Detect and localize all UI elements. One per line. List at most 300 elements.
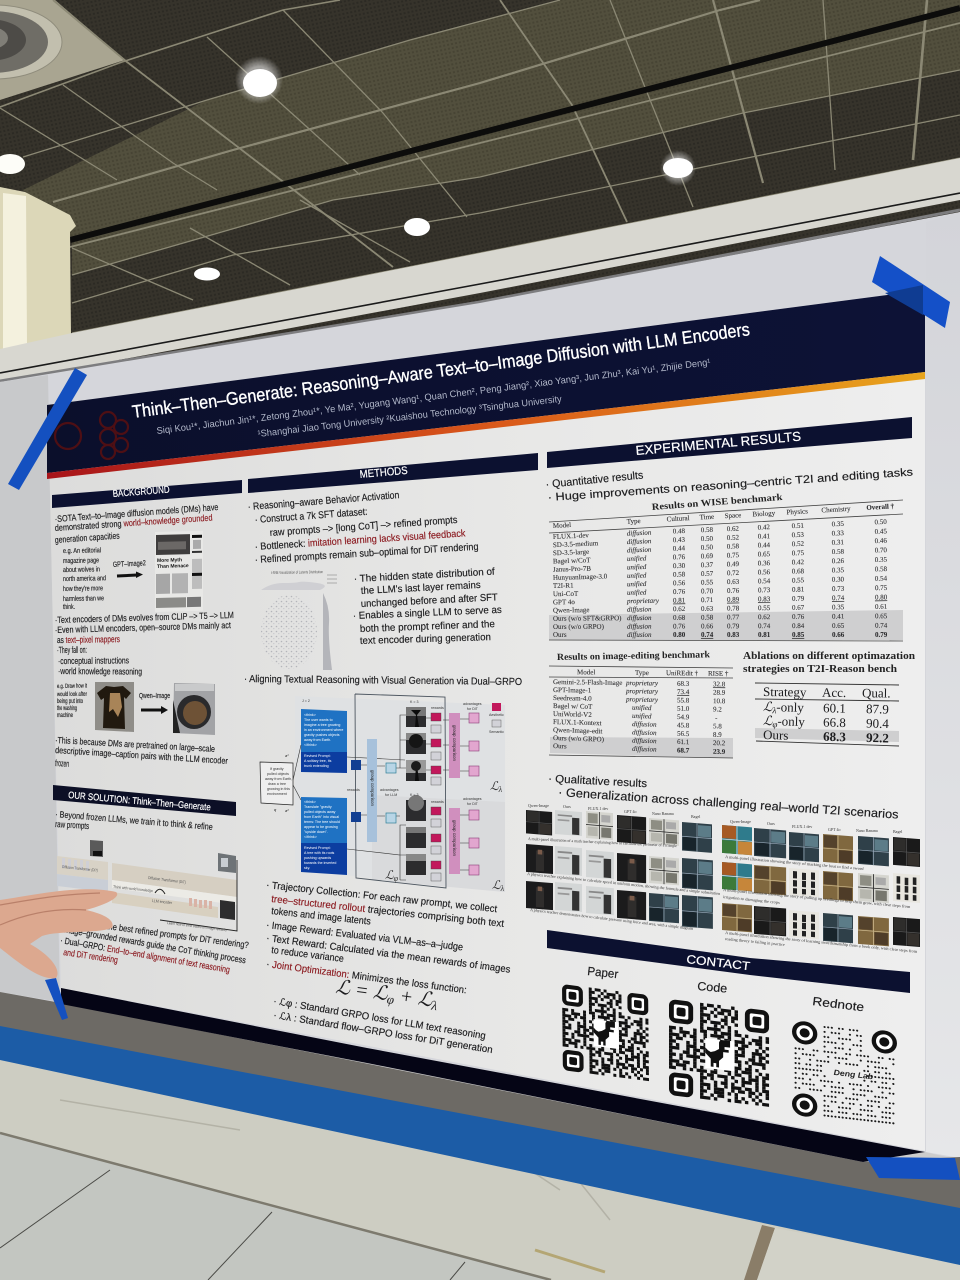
diagram labels [274,699,482,813]
qualitative captions: A multi-panel illustration showing the story of learning swordsmanship from a book only, with clear steps from [725,930,918,955]
table: WISE benchmark: Time [699,513,714,522]
qualitative method labels: Nano Banana [652,811,674,816]
solution bullets: and DiT rendering [63,947,119,965]
gray skirting [0,992,960,1212]
qualitative method labels: FLUX.1 dev [792,824,812,829]
table: WISE benchmark: 0.76 [792,613,805,621]
LLM output 1: in an environment where [304,728,343,732]
table: WISE benchmark: 0.48 [673,527,686,536]
table: image editing benchmark: FLUX.1-Kontext [553,718,602,727]
formula: + ℒ [393,984,434,1012]
table: WISE benchmark: Cultural [666,514,690,523]
table: WISE benchmark: 0.57 [701,570,714,578]
LLM output 2: Revised Prompt: [304,846,331,850]
raw prompt box: growing in this [267,787,290,791]
table: ablations: strategies on T2I-Reason bench [743,664,897,675]
table: image editing benchmark: 61.1 [677,738,690,746]
table: WISE benchmark: 0.66 [701,622,714,630]
LLM output 1: </think> [304,743,317,747]
image: magazine page: More Myth [157,557,182,564]
table: ablations: λ [771,705,776,715]
table: image editing benchmark: Model [577,668,595,676]
table: ablations: Acc. [822,685,846,700]
background conclusion [55,735,228,769]
table: WISE benchmark: Space [724,511,742,520]
LLM output 2: from Earth" into visual [304,815,339,819]
loss labels: λ [498,785,503,794]
LLM output 2: pushing upwards [304,856,331,860]
table: WISE benchmark: 0.37 [701,561,714,569]
example prompt: editorial: north america and [63,575,106,583]
table: ablations: ℒ [763,699,773,714]
loss labels: ℒ [490,779,499,793]
table: ablations: -only [776,699,804,715]
table: WISE benchmark: 0.70 [875,546,888,555]
table: image editing benchmark: 32.8 [713,680,726,688]
methods bullets: tokens and image latents [271,906,371,928]
example prompt: editorial: e.g. An editorial [63,547,101,555]
table: image editing benchmark: 54.9 [677,713,690,721]
diagram labels: rewards [347,788,360,792]
table: WISE benchmark: 0.62 [673,605,686,613]
table: ablations: Ablations on different optimazation [743,651,915,662]
background text block: as text–pixel mappers [57,634,120,645]
table: WISE benchmark: diffusion [627,631,652,639]
table: WISE benchmark: 0.89 [727,596,740,604]
table: WISE benchmark: unified [627,554,647,563]
LLM output 2 [301,797,347,875]
background text block: demonstrated strong world–knowledge grounded [54,513,213,533]
diagram: diffusion transformer and LLM encoder: Think with world knowledge [113,884,154,893]
qualitative method labels: Nano Banana [856,828,878,833]
table: image editing benchmark: 68.7 [677,746,690,755]
table: ablations: ℒ [763,713,773,728]
table: WISE benchmark: 0.58 [701,613,714,622]
table: WISE benchmark: 0.63 [727,578,740,586]
table: image editing benchmark: Ours [553,742,567,750]
table: image editing benchmark: proprietary [625,695,659,704]
table: ablations: Qual. [862,685,891,701]
qualitative captions: A multi-panel illustration of a math teacher explaining how to calculate the perimeter of a triangle [528,836,677,848]
methods bullets: · ℒλ : Standard flow–GRPO loss for DiT generation [273,1010,493,1056]
table: WISE benchmark: 0.44 [758,541,771,550]
qualitative captions: A multi-panel illustration showing the story of pulling up seedlings to help them grow, with clear steps from [723,887,912,910]
table: WISE benchmark: SD-3.5-large [553,548,589,557]
finding text: both the prompt refiner and the [360,619,495,635]
table: image editing benchmark [549,650,733,758]
connectors [293,715,469,880]
table: WISE benchmark: 0.33 [832,529,845,538]
table: ablations: 92.2 [866,730,889,746]
table: WISE benchmark: 0.69 [701,552,714,560]
table: image editing benchmark: Type [635,669,649,677]
arrow: GPT-Image2: GPT–Image2 [113,558,146,569]
table: WISE benchmark: 0.76 [673,588,686,596]
loss labels: φ [394,874,399,883]
example prompt: editorial: magazine page [63,557,99,565]
table: WISE benchmark: 0.81 [673,596,686,605]
qualitative captions: A multi-panel illustration showing the story of marking the boat to find a sword [725,854,864,871]
table: WISE benchmark: 0.46 [875,537,888,545]
table: WISE benchmark: 0.50 [701,543,714,552]
table: WISE benchmark: 0.81 [758,631,771,639]
qualitative captions: reading theory to failing in practice [725,936,785,947]
blue floor trim [0,1026,960,1265]
arrow: Qwen-Image [139,693,170,714]
panel: methods [244,453,538,1056]
legend: Semantic [489,730,504,734]
example prompt: editorial: how they're more [63,585,103,593]
example prompt: washing: machine [57,713,73,719]
background conclusion: ·This is because DMs are pretrained on large–scale [55,735,215,754]
heading: background: BACKGROUND [112,485,170,500]
qualitative method labels: FLUX.1 dev [588,806,608,811]
table: WISE benchmark: 0.41 [758,532,771,541]
LLM output 1: Revised Prompt: [304,754,331,758]
table: WISE benchmark: 0.85 [792,631,805,639]
image: t-shirt [95,682,134,732]
heading: contact [547,930,910,993]
qualitative method labels: Qwen-Image [528,803,549,808]
diagram: diffusion transformer and LLM encoder: Diffusion Transformer (DiT) [148,875,187,885]
raw prompt box: away from Earth, [265,777,292,781]
background text block: ·Text encoders of DMs evolves from CLIP –> T5 –> LLM [55,610,234,625]
LLM output 1: <think> [304,713,316,717]
table: WISE benchmark: 0.68 [673,614,686,622]
table: WISE benchmark: 0.78 [727,604,740,613]
table: WISE benchmark: 0.56 [673,579,686,587]
table: WISE benchmark: 0.65 [875,612,888,620]
table: WISE benchmark: 0.50 [701,535,714,543]
table: WISE benchmark: Physics [786,507,808,517]
table: WISE benchmark: 0.58 [875,565,888,573]
table: WISE benchmark: 0.45 [874,527,888,536]
solution bullets: · Dual–GRPO: End–to–end alignment of text reasoning [60,935,231,975]
blue tape: bottom left [45,978,68,1020]
table: WISE benchmark: 0.35 [875,556,888,564]
table: WISE benchmark: 0.68 [792,567,805,576]
qr code: rednote [794,994,897,1125]
table: ablations: Ours [763,727,789,743]
table: ablations: Strategy [763,684,807,700]
table: WISE benchmark: Model [553,521,571,530]
ceiling [0,0,960,360]
table: ablations: 87.9 [866,701,889,717]
table: WISE benchmark: diffusion [627,614,652,622]
pillar [0,187,76,350]
table: WISE benchmark: 0.55 [758,604,771,612]
table: WISE benchmark: 0.55 [701,578,714,587]
heading: experimental results: EXPERIMENTAL RESULTS [635,429,802,458]
table: WISE benchmark: 0.35 [832,603,845,611]
background text block: ·world knowledge reasoning [58,666,142,677]
table: WISE benchmark: Ours (w/o GRPO) [553,623,605,631]
table: image editing benchmark: UniWorld-V2 [553,710,592,719]
diagram labels: K = 3 [410,793,418,797]
display board [0,158,960,1160]
table: WISE benchmark: unified [627,563,647,571]
table: image editing benchmark: unified [632,712,652,720]
table: image editing benchmark: 68.3 [677,680,690,688]
table: WISE benchmark: 0.42 [792,558,805,566]
background conclusion: descriptive image–caption pairs with the LLM encoder [55,745,228,766]
table: WISE benchmark: 0.26 [832,557,845,565]
subheading: dual-GRPO: · Aligning Textual Reasoning with Visual Generation via Dual–GRPO [244,674,522,688]
table: WISE benchmark: 0.70 [701,587,714,595]
qualitative captions: A physics teacher explaining how to calculate speed in uniform motion, showing the formula and a simple substitution [527,871,720,897]
LLM output 2: "upside down". [304,830,328,834]
table: WISE benchmark: 0.73 [832,585,845,593]
qualitative method labels: GPT 4o [624,809,636,814]
table: image editing benchmark: Bagel w/ CoT [553,702,593,711]
floor [0,1050,960,1280]
panel: background [52,480,249,975]
example prompt: editorial: about wolves in [63,566,100,574]
table: image editing benchmark: unified [632,704,652,712]
table: WISE benchmark: 0.83 [727,631,740,639]
qualitative heading [548,773,899,822]
table: WISE benchmark: 0.63 [701,605,714,613]
table: image editing benchmark: 20.2 [713,739,726,747]
diagram labels: a¹ [285,753,289,758]
table: WISE benchmark: 0.51 [791,522,805,530]
ceiling lighter band around beam [23,0,960,275]
reasoning-aware behavior activation: · Reasoning–aware Behavior Activation [247,490,400,513]
table: WISE benchmark: 0.84 [792,622,805,630]
table: WISE benchmark: 0.41 [832,613,845,621]
blue tape: top left [8,368,87,490]
background text block: ·Even with LLM encoders, open–source DMs mainly act [55,620,231,635]
table: WISE benchmark: 0.76 [727,587,740,595]
blue tape: bottom right [866,1157,960,1180]
table: WISE benchmark: 0.30 [673,562,686,570]
quantitative heading: · Huge improvements on reasoning–centric T2I and editing tasks [547,466,914,504]
table: WISE benchmark: 0.35 [832,566,845,574]
table: WISE benchmark: 0.71 [701,596,714,604]
generated tree images [406,707,426,875]
table: WISE benchmark: Type [627,517,641,526]
diagram labels: K = 3 [410,700,418,704]
heading: methods: METHODS [359,465,408,481]
table: WISE benchmark: 0.50 [874,518,887,526]
raw prompt box: environment [267,792,287,796]
table: WISE benchmark: 0.67 [792,604,805,612]
table: WISE benchmark: 0.62 [758,613,771,621]
affiliations: ¹Shanghai Jiao Tong University ²Kuaishou Technology ³Tsinghua University [257,394,563,440]
LLM output 2: appear to be growing [304,825,338,829]
table: WISE benchmark: proprietary [626,597,660,605]
table: WISE benchmark: 0.73 [758,586,771,594]
heading: methods [248,453,538,493]
diagram labels: advantages [463,797,482,801]
table: WISE benchmark: 0.66 [832,631,845,639]
table: WISE benchmark: diffusion [627,605,652,614]
table: image editing benchmark: Qwen-Image-edit [553,726,603,735]
solution text: raw prompts [55,819,90,831]
qualitative heading: · Generalization across challenging real–world T2I scenarios [558,785,899,822]
table: WISE benchmark: 0.36 [758,559,771,568]
table: image editing benchmark: Ours (w/o GRPO) [553,734,605,744]
table: WISE benchmark: 0.74 [875,622,888,630]
table: WISE benchmark: 0.76 [673,622,686,630]
LLM output 2: sky. [304,866,310,870]
poster footer band [61,988,925,1162]
background text block: generation capacities [54,530,120,545]
LLM output 1: imagine a tree growing [304,723,340,727]
table: WISE benchmark: 0.77 [727,613,740,621]
table: WISE benchmark: 0.42 [758,523,771,532]
table: WISE benchmark: unified [627,588,647,597]
table: image editing benchmark: 56.5 [677,730,690,738]
table: WISE benchmark: Uni-CoT [553,590,579,598]
table: WISE benchmark: 0.53 [792,531,805,539]
loss labels: ℒ [385,868,394,882]
LLM output 1 [301,709,347,773]
reasoning-aware behavior activation [247,490,479,566]
table: WISE benchmark: unified [627,580,647,588]
table: image editing benchmark: 9.2 [713,705,722,714]
reasoning-aware behavior activation: · Bottleneck: imitation learning lacks visual feedback [254,528,467,553]
example prompt: editorial [63,547,106,611]
table: WISE benchmark: 0.30 [832,575,845,584]
group comparison DiT [449,713,460,874]
solution bullets [55,914,249,975]
qualitative captions [527,836,918,955]
reward squares [431,713,441,881]
diagram labels: rewards [431,800,444,804]
table: WISE benchmark: 0.44 [673,544,686,553]
qr code: code [669,979,769,1105]
table: WISE benchmark: 0.35 [831,520,845,528]
table: WISE benchmark: 0.79 [727,622,740,630]
header band [47,290,925,479]
finding text [353,567,502,647]
table: WISE benchmark [549,493,903,641]
LLM output 2: </think> [304,835,317,839]
table: WISE benchmark: 0.58 [727,542,740,551]
group comparison LLM: group comparison [370,770,375,807]
table: WISE benchmark: 0.58 [673,570,686,579]
table: WISE benchmark: 0.52 [792,540,805,548]
air vent [0,0,125,100]
table: WISE benchmark: 0.83 [758,595,771,603]
LLM output 1: gravity pushes objects [304,733,340,737]
reasoning-aware behavior activation: · Construct a 7k SFT dataset: [254,507,368,526]
table: WISE benchmark: 0.58 [832,548,845,556]
qualitative method labels: Qwen-Image [730,819,751,824]
example prompt: washing [56,683,87,719]
ceiling lights [0,56,696,280]
diagram labels: for DiT [467,802,479,806]
table: WISE benchmark: 0.61 [875,603,888,611]
reasoning-aware behavior activation: · Refined prompts remain sub–optimal for DiT rendering [255,542,479,566]
table: image editing benchmark: - [715,714,718,722]
table: image editing benchmark: GPT-Image-1 [553,686,592,695]
table: WISE benchmark: 0.56 [758,568,771,576]
blue tape: top right [872,256,950,328]
table: image editing benchmark: Gemini-2.5-Flash-Image [553,678,622,687]
table: ablations: 90.4 [866,716,890,731]
panel: experimental results [526,417,920,1125]
example prompt: washing: being put into [57,699,83,705]
example prompt: editorial: think. [63,604,75,611]
qualitative image grid: left [526,810,713,929]
qr code: rednote: Deng Lab [834,1067,873,1081]
table: WISE benchmark: Results on WISE benchmark [651,493,784,513]
group comparison DiT: group comparison [452,725,457,762]
table: WISE benchmark: GPT 4o [553,598,575,606]
table: ablations: -only [777,713,806,729]
table: ablations: 66.8 [823,714,846,730]
table: image editing benchmark: proprietary [625,687,659,696]
diagram labels: rewards [431,706,444,710]
diagram labels: advantages [380,788,399,792]
diagram: diffusion transformer and LLM encoder: Diffusion Transformer (DiT) [62,864,99,873]
LLM output 2: A tree with its roots [304,851,335,855]
LLM output 1: A solitary tree, its [304,759,332,763]
image: magazine page: Than Menace [157,563,189,570]
table: image editing benchmark: diffusion [632,736,657,745]
table: image editing benchmark: 28.9 [713,689,726,697]
LLM output 1: away from Earth. [304,738,331,742]
table: WISE benchmark: diffusion [627,537,652,546]
diagram labels: J = 2 [302,699,310,703]
diagram labels: a² [285,808,289,813]
raw prompt box: draw a tree [268,782,286,786]
qr code: code: Code [697,979,728,996]
table: WISE benchmark: diffusion [627,546,652,554]
advantage squares [469,713,479,875]
hand [0,889,117,978]
LLM output 2: pulled objects away [304,810,336,814]
table: WISE benchmark: 0.79 [875,631,888,639]
table: ablations: φ [772,719,778,729]
table: WISE benchmark: Overall † [866,502,895,512]
table: WISE benchmark: 0.62 [727,525,740,533]
table: WISE benchmark: 0.75 [792,549,805,557]
table: WISE benchmark: 0.58 [701,526,714,534]
table: image editing benchmark: 8.9 [713,731,722,739]
group comparison LLM [367,739,377,842]
legend [489,703,504,734]
table: image editing benchmark: UniREdit † [666,669,699,678]
LLM output 1: trunk extending [304,764,329,768]
example prompt: washing: e.g. Draw how it [57,683,87,690]
table: image editing benchmark: diffusion [632,720,657,729]
finding text: unchanged before and after SFT [361,592,498,610]
background text block: ·conceptual instructions [58,655,129,666]
table: image editing benchmark: proprietary [625,679,659,687]
qualitative method labels: Bagel [893,829,903,834]
table: image editing benchmark: 23.9 [713,748,726,756]
loss labels: λ [500,884,505,893]
formula: ℒ = ℒ [334,976,389,1005]
methods bullets: to reduce variance [271,945,345,965]
loss labels: ℒ [492,878,501,892]
finding text: text encoder during generation [360,632,491,647]
reasoning-aware behavior activation: raw prompts –> [long CoT] –> refined prompts [269,515,458,539]
image: magazine page [155,531,203,612]
quantitative heading: · Quantitative results [545,469,644,491]
table: WISE benchmark: 0.80 [673,631,686,639]
diagram: dual-GRPO tree rollout [260,694,505,893]
formula: φ [386,991,395,1007]
table: WISE benchmark: Ours (w/o SFT&GRPO) [553,614,622,623]
qualitative method labels: GPT 4o [828,827,840,832]
table: WISE benchmark: 0.54 [875,574,888,583]
table: WISE benchmark: 0.43 [673,536,686,544]
background text block: ·They fall on: [57,645,87,655]
